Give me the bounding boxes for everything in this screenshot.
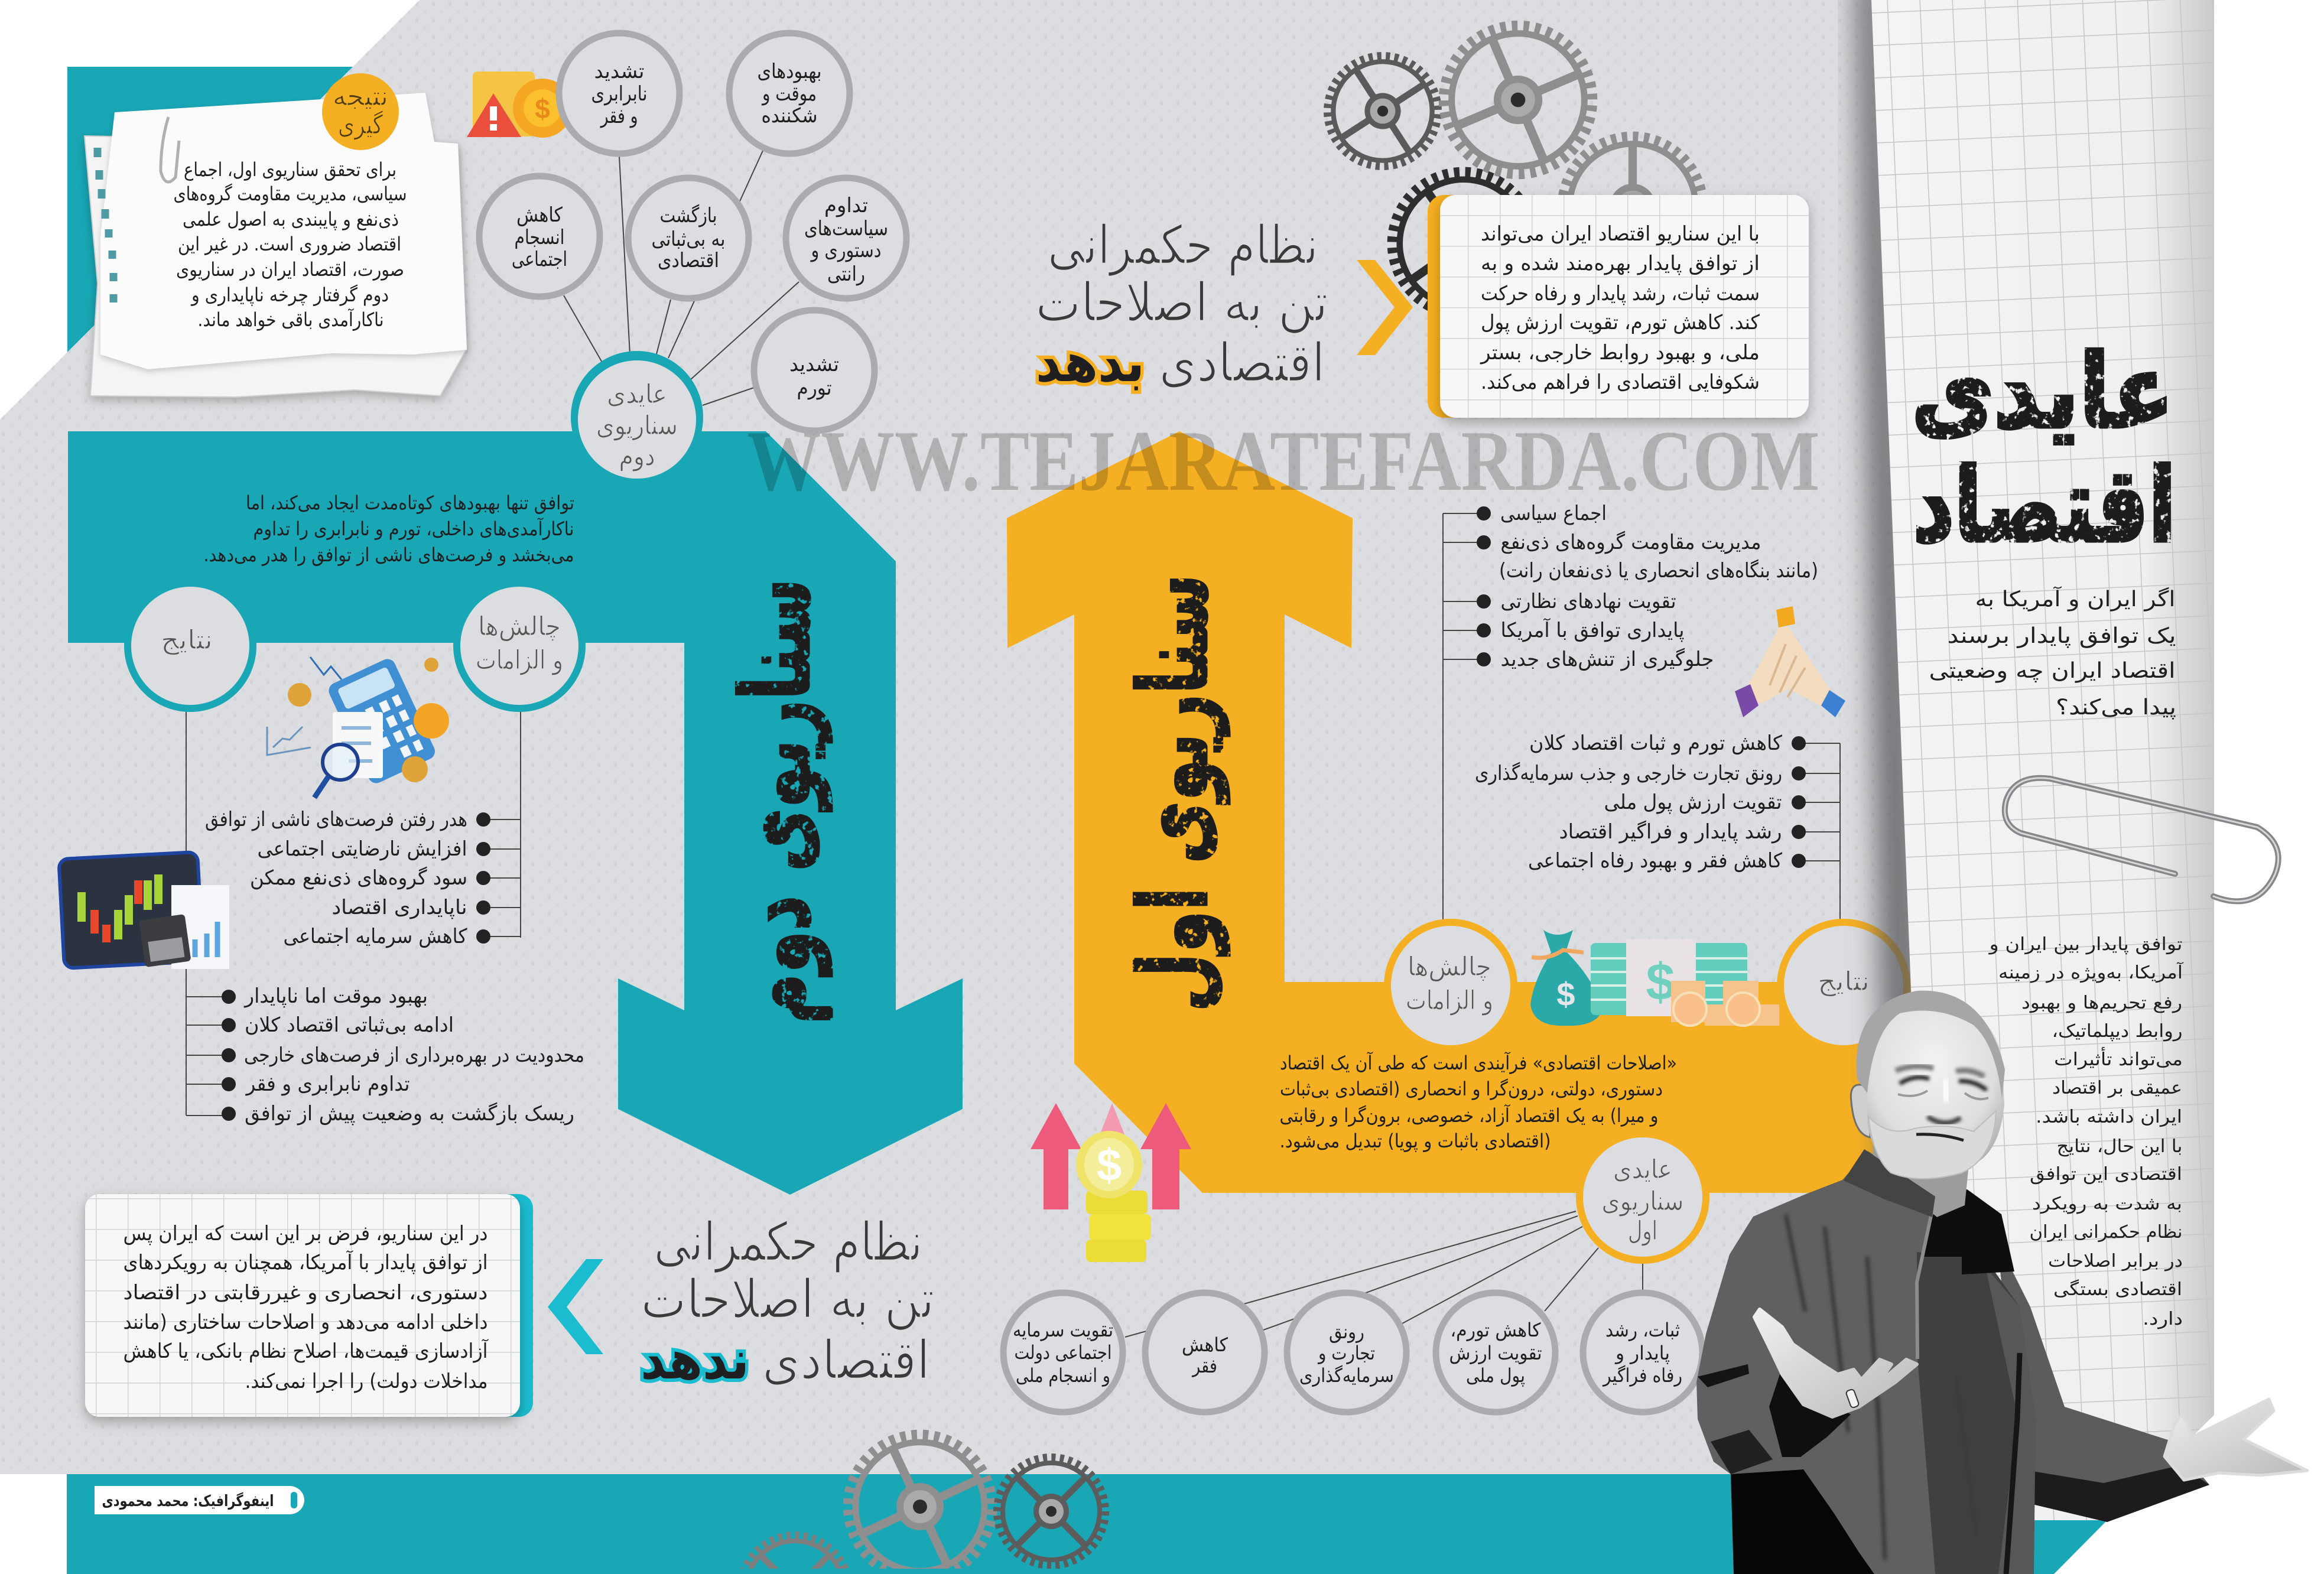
definition text economic reforms: (اقتصادی باثبات و پویا) تبدیل می‌شود. — [1280, 1130, 1551, 1152]
side body text: به شدت به رویکرد — [2032, 1193, 2182, 1214]
bubble: fragile gains: بهبودهای — [758, 60, 821, 83]
card: scenario one text: با این سناریو اقتصاد ایران می‌تواند — [1481, 222, 1760, 246]
definition text economic reforms: دستوری، دولتی، درون‌گرا و انحصاری (اقتصادی بی‌ثبات — [1280, 1078, 1663, 1100]
card: scenario two text: در این سناریو، فرض بر این است که ایران پس — [123, 1222, 488, 1245]
icon: warning coin: $ — [535, 93, 550, 124]
circle: scenario two benefits: دوم — [619, 441, 655, 471]
bubble: trade: رونق — [1329, 1321, 1364, 1343]
panel: teal scenario two arrow — [68, 431, 963, 1195]
card: scenario two text: مداخلات دولت) را اجرا نمی‌کند. — [245, 1370, 488, 1393]
shirt — [1917, 1252, 2027, 1574]
list connectors scenario two — [186, 711, 521, 1116]
title: اقتصاد — [1913, 446, 2176, 565]
ear — [1851, 1085, 1870, 1137]
panel: conclusion note — [84, 73, 467, 397]
intro text scenario two: می‌بخشد و فرصت‌های ناشی از توافق را هدر می‌دهد. — [203, 544, 574, 566]
nose — [1944, 1079, 1948, 1102]
connector lines scenario two outcomes — [564, 151, 799, 405]
bubble: currency: پول ملی — [1466, 1364, 1525, 1387]
icon: joined hands — [1735, 606, 1845, 717]
collar right side — [1844, 1149, 1935, 1217]
definition text economic reforms — [1280, 1051, 1677, 1152]
list: scenario one challenges: جلوگیری از تنش‌های جدید — [1501, 648, 1714, 671]
credit label: اینفوگرافیک: محمد محمودی — [102, 1492, 274, 1510]
list connectors scenario one — [1443, 513, 1840, 922]
list: scenario two challenges: ناپایداری اقتصاد — [332, 896, 467, 919]
head — [1866, 1001, 2004, 1176]
side body text: رفع تحریم‌ها و بهبود — [2021, 993, 2182, 1013]
card: scenario one text: سمت ثبات، رشد پایدار و رفاه حرکت — [1481, 282, 1760, 305]
conclusion text: اقتصاد ضروری است. در غیر این — [178, 233, 401, 255]
neck — [1873, 1134, 1971, 1217]
bubble: cohesion: انسجام — [514, 226, 565, 249]
title: عایدی — [1912, 332, 2174, 451]
bubble: poverty — [1145, 1293, 1265, 1412]
side body text: آمریکا، به‌ویژه در زمینه — [1998, 962, 2184, 983]
list: scenario one challenges: (مانند بنگاه‌های انحصاری یا ذی‌نفعان رانت) — [1499, 559, 1818, 583]
paper clip — [161, 117, 179, 182]
bubble: instability: به بی‌ثباتی — [651, 227, 726, 251]
list: scenario one results: کاهش تورم و ثبات اقتصاد کلان — [1529, 731, 1783, 755]
circle: results scenario one — [1777, 919, 1910, 1052]
bubble: instability — [628, 178, 749, 298]
title: scenario two vertical: سناریوی دوم — [720, 578, 831, 1024]
bubble: trade: تجارت و — [1317, 1342, 1375, 1364]
bubble: inequality — [559, 33, 680, 154]
title — [1912, 332, 2176, 565]
heading: governance no: ندهد — [641, 1329, 749, 1391]
right sleeve shadow — [2033, 1465, 2209, 1522]
circle: challenges scenario two — [453, 580, 586, 712]
badge: conclusion: گیری — [338, 110, 383, 140]
right sleeve — [1997, 1241, 2209, 1522]
list: scenario two challenges — [205, 808, 490, 948]
side body text: دارد. — [2143, 1309, 2183, 1329]
bubble: fragile gains: شکننده — [761, 104, 818, 128]
bubble: poverty: فقر — [1191, 1355, 1217, 1377]
side body text: در برابر اصلاحات — [2048, 1251, 2183, 1271]
side body text — [1988, 934, 2184, 1329]
left cuff shadow — [1769, 1374, 1851, 1457]
binder holes — [97, 148, 113, 303]
card: scenario one text: ملی، و بهبود روابط خارجی، بستر — [1480, 341, 1760, 365]
circle: scenario two benefits: سناریوی — [596, 411, 678, 441]
brows — [1896, 1066, 1984, 1077]
side body text: می‌تواند تأثیرات — [2054, 1046, 2183, 1070]
bubble: rent policies: دستوری و — [810, 239, 882, 262]
card: scenario two text: داخلی ادامه می‌دهد و اصلاحات ساختاری (مانند — [123, 1310, 488, 1334]
heading: governance no: اقتصادی — [762, 1329, 930, 1391]
conclusion text: ذی‌نفع و پایبندی به اصول علمی — [183, 208, 399, 230]
circle: challenges scenario one — [1384, 919, 1517, 1052]
jacket edge highlight — [1917, 1196, 1935, 1359]
bubble: cohesion: اجتماعی — [512, 248, 567, 271]
eyes — [1900, 1077, 1987, 1090]
bubble: cohesion: کاهش — [516, 203, 563, 227]
badge: conclusion: نتیجه — [333, 82, 388, 112]
side body text: با این حال، نتایج — [2056, 1136, 2183, 1157]
bubble: stability: ثبات، رشد — [1605, 1319, 1680, 1341]
connector lines scenario one outcomes — [1125, 1211, 1643, 1337]
bubble: inflation — [754, 310, 875, 431]
bubble: rent policies: تداوم — [824, 194, 868, 217]
subtitle question — [1929, 586, 2176, 720]
bubble: inequality: و فقر — [600, 105, 638, 128]
circle: scenario two benefits — [571, 351, 703, 483]
list: scenario two results: بهبود موقت اما ناپایدار — [243, 984, 428, 1008]
beard — [1868, 1111, 1996, 1179]
front torn paper — [100, 93, 467, 369]
panel: grid paper column — [1871, 0, 2214, 1520]
bubble: inequality: نابرابری — [591, 82, 648, 106]
bubble: currency: تقویت ارزش — [1449, 1342, 1542, 1364]
heading: governance yes: نظام حکمرانی — [1048, 214, 1318, 277]
list: scenario two results: ادامه بی‌ثباتی اقتصاد کلان — [245, 1013, 454, 1037]
watermark: WWW.TEJARATEFARDA.COM — [747, 413, 1820, 509]
bubble: stability: پایدار و — [1614, 1342, 1670, 1364]
person photo illustration — [1696, 991, 2307, 1574]
bubble: social capital: اجتماعی دولت — [1014, 1341, 1112, 1364]
ring — [1845, 1389, 1860, 1408]
list: scenario two challenges: افزایش نارضایتی اجتماعی — [258, 837, 467, 861]
title: scenario one vertical: سناریوی اول — [1118, 574, 1229, 1012]
bubble: inflation: تورم — [797, 376, 832, 400]
side body text: اقتصادی بستگی — [2053, 1279, 2182, 1300]
gears top right — [1318, 4, 1731, 326]
side body text: نظام حکمرانی ایران — [2029, 1222, 2183, 1243]
bubble: rent policies: سیاست‌های — [804, 217, 888, 240]
list: scenario one results — [1475, 731, 1806, 873]
left sleeve dark band — [1698, 1364, 1749, 1387]
definition text economic reforms: «اصلاحات اقتصادی» فرآیندی است که طی آن یک اقتصاد — [1280, 1051, 1677, 1074]
list: scenario one challenges: مدیریت مقاومت گروه‌های ذی‌نفع — [1501, 531, 1761, 554]
card: scenario one text — [1428, 195, 1809, 418]
gears bottom — [741, 1430, 1109, 1569]
definition text economic reforms: و میرا) به یک اقتصاد آزاد، خصوصی، برون‌گرا و رقابتی — [1280, 1104, 1658, 1127]
bubble: social capital — [1003, 1293, 1123, 1412]
icon: candlestick chart — [58, 852, 229, 969]
conclusion text: ناکارآمدی باقی خواهد ماند. — [197, 308, 384, 331]
circle: scenario two benefits: عایدی — [607, 379, 667, 409]
circle: results scenario two — [124, 580, 256, 712]
heading: governance yes: اقتصادی — [1159, 332, 1325, 394]
bubble: social capital: تقویت سرمایه — [1013, 1319, 1113, 1341]
jacket folds — [1786, 1214, 1977, 1560]
conclusion text: صورت، اقتصاد ایران در سناریوی — [176, 258, 404, 281]
subtitle question: اگر ایران و آمریکا به — [1975, 586, 2176, 612]
heading: governance yes: بدهد — [1036, 332, 1145, 394]
list: scenario one challenges: اجماع سیاسی — [1500, 502, 1607, 525]
conclusion text: دوم گرفتار چرخه ناپایداری و — [190, 284, 389, 306]
jacket left panel — [1696, 1151, 1935, 1574]
list: scenario two results: ریسک بازگشت به وضعیت پیش از توافق — [245, 1102, 574, 1126]
icon: money bag and banknotes — [1530, 930, 1779, 1026]
icon: rising arrows with coins — [1031, 1103, 1191, 1262]
list: scenario two results — [222, 984, 584, 1126]
icon: money bag and banknotes: $ — [1646, 952, 1675, 1011]
bubble: rent policies: رانتی — [827, 262, 865, 286]
card: scenario one text: کند. کاهش تورم، تقویت ارزش پول — [1481, 311, 1760, 334]
icon: calculator and magnifier — [267, 656, 449, 798]
side body text: توافق پایدار بین ایران و — [1988, 934, 2183, 955]
right jacket strip — [1985, 1267, 2036, 1574]
top-left teal corner — [67, 67, 353, 352]
hair — [1857, 991, 2005, 1099]
back torn paper — [84, 136, 467, 397]
list: scenario one results: رشد پایدار و فراگیر اقتصاد — [1559, 820, 1782, 844]
bubble: trade — [1287, 1293, 1406, 1412]
bubble: instability: بازگشت — [659, 204, 717, 227]
list: scenario two results: تداوم نابرابری و فقر — [245, 1072, 410, 1096]
panel: scenario two outcome bubbles — [479, 33, 906, 431]
bottom teal band — [67, 1474, 2107, 1574]
list: scenario one results: تقویت ارزش پول ملی — [1604, 791, 1782, 814]
bubble: fragile gains: موقت و — [761, 82, 817, 106]
side body text: عمیقی بر اقتصاد — [2052, 1078, 2182, 1098]
credit label — [95, 1486, 304, 1514]
arrow: yellow chevron — [1357, 260, 1413, 355]
bubble: stability: رفاه فراگیر — [1602, 1364, 1682, 1387]
bubble: stability — [1583, 1293, 1702, 1412]
card: scenario two text: از توافق پایدار با آمریکا، همچنان به رویکردهای — [123, 1250, 488, 1274]
bubble: cohesion — [479, 176, 600, 297]
circle: results scenario two: نتایج — [161, 625, 213, 655]
list: scenario one results: کاهش فقر و بهبود رفاه اجتماعی — [1528, 849, 1783, 873]
panel: scenario one outcome bubbles — [1003, 1293, 1702, 1412]
intro text scenario two: ناکارآمدی‌های داخلی، تورم و نابرابری را تداوم — [253, 517, 574, 540]
bubble: currency: کاهش تورم، — [1450, 1319, 1541, 1341]
list: scenario two challenges: هدر رفتن فرصت‌های ناشی از توافق — [205, 808, 467, 831]
black collar — [1922, 1189, 2014, 1274]
card: scenario two text: دستوری، انحصاری و غیررقابتی در اقتصاد — [123, 1281, 488, 1305]
badge: conclusion — [322, 73, 399, 150]
heading: governance no: نظام حکمرانی — [654, 1211, 923, 1273]
circle: challenges scenario two: چالش‌ها — [478, 612, 561, 642]
paper shadow — [1855, 0, 1944, 1477]
bubble: social capital: و انسجام ملی — [1016, 1364, 1110, 1387]
list: scenario one results: رونق تجارت خارجی و جذب سرمایه‌گذاری — [1475, 762, 1782, 785]
list: scenario one challenges — [1477, 502, 1818, 671]
side body text: اقتصادی این توافق — [2030, 1164, 2182, 1185]
panel: yellow scenario one arrow — [1007, 431, 1909, 1193]
circle: scenario one benefits — [1576, 1130, 1709, 1264]
list: scenario two challenges: کاهش سرمایه اجتماعی — [284, 925, 467, 948]
bubble: currency — [1436, 1293, 1555, 1412]
circle: challenges scenario one: و الزامات — [1406, 986, 1493, 1016]
intro text scenario two: توافق تنها بهبودهای کوتاه‌مدت ایجاد می‌کند، اما — [246, 492, 574, 514]
circle: challenges scenario two: و الزامات — [476, 645, 563, 675]
heading: governance no: تن به اصلاحات — [641, 1269, 935, 1331]
intro text scenario two — [203, 492, 574, 566]
subtitle question: یک توافق پایدار برسند — [1948, 624, 2176, 648]
trousers — [1731, 1465, 1874, 1574]
side body text: روابط دیپلماتیک، — [2052, 1021, 2183, 1042]
icon: rising arrows with coins: $ — [1097, 1140, 1122, 1191]
heading: governance yes: تن به اصلاحات — [1035, 272, 1328, 334]
conclusion text: برای تحقق سناریوی اول، اجماع — [184, 158, 396, 181]
circle: results scenario one: نتایج — [1818, 967, 1870, 997]
list: scenario one challenges: پایداری توافق با آمریکا — [1501, 618, 1684, 642]
bubble: inflation: تشدید — [789, 353, 839, 376]
list: scenario two challenges: سود گروه‌های ذی‌نفع ممکن — [250, 866, 467, 890]
conclusion text — [174, 158, 407, 331]
arrow: teal chevron — [548, 1259, 603, 1354]
list: scenario one challenges: تقویت نهادهای نظارتی — [1501, 590, 1676, 613]
icon: warning coin — [467, 71, 572, 138]
circle: scenario one benefits: سناریوی — [1601, 1186, 1684, 1217]
icon: large paperclip — [2005, 778, 2279, 901]
card: scenario one text: شکوفایی اقتصادی را فراهم می‌کند. — [1481, 370, 1760, 394]
mouth — [1916, 1134, 1964, 1140]
bubble: trade: سرمایه‌گذاری — [1299, 1364, 1394, 1387]
icon: money bag and banknotes: $ — [1556, 975, 1575, 1013]
subtitle question: اقتصاد ایران چه وضعیتی — [1929, 659, 2176, 683]
bubble: fragile gains — [729, 33, 850, 154]
heading: governance yes — [1035, 214, 1328, 394]
heading: governance no — [641, 1211, 935, 1391]
circle: scenario one benefits: عایدی — [1613, 1155, 1672, 1185]
card: scenario one text: از توافق پایدار بهره‌مند شده و به — [1481, 252, 1760, 275]
conclusion text: سیاسی، مدیریت مقاومت گروه‌های — [174, 183, 407, 205]
card: scenario two text: آزادسازی قیمت‌ها، اصلاح نظام بانکی، یا کاهش — [123, 1339, 489, 1363]
bubble: instability: اقتصادی — [658, 249, 719, 272]
bubble: rent policies — [786, 178, 906, 298]
bubble: inequality: تشدید — [594, 60, 644, 83]
circle: challenges scenario one: چالش‌ها — [1408, 952, 1491, 982]
left hand — [1754, 1309, 1917, 1417]
card: scenario two text — [85, 1194, 533, 1417]
side body text: ایران داشته باشد. — [2036, 1107, 2182, 1127]
subtitle question: پیدا می‌کند؟ — [2056, 695, 2176, 720]
background panel — [0, 0, 1926, 1474]
right hand — [2164, 1399, 2307, 1480]
list: scenario two results: محدودیت در بهره‌برداری از فرصت‌های خارجی — [244, 1043, 584, 1067]
bubble: poverty: کاهش — [1182, 1334, 1228, 1356]
circle: scenario one benefits: اول — [1628, 1216, 1657, 1246]
